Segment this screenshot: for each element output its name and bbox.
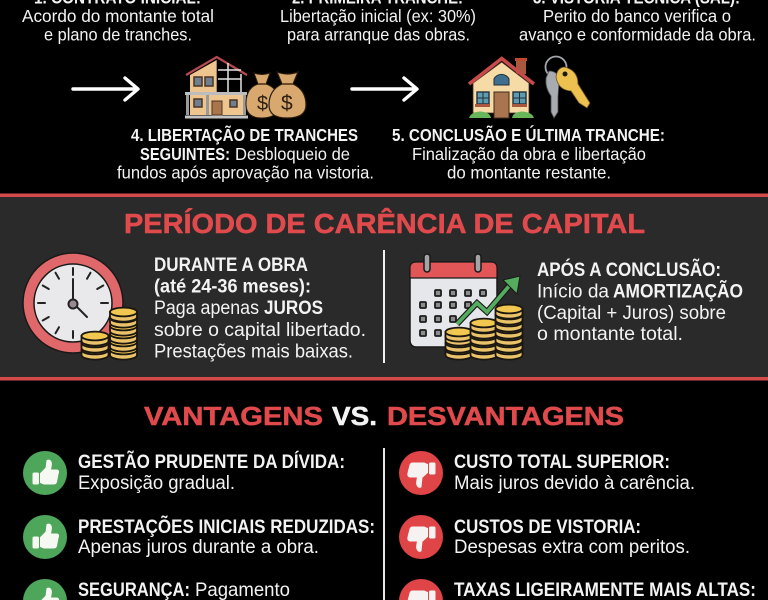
heading: vantagens vs desvantagens: VS. bbox=[332, 401, 377, 431]
step 1: contrato inicial bbox=[22, 0, 214, 44]
arrow 1 bbox=[73, 78, 138, 100]
text: durante a obra: sobre o capital libertado. bbox=[154, 320, 366, 341]
step 4: libertacao de tranches bbox=[117, 124, 374, 182]
advantage 1: Exposição gradual. bbox=[78, 473, 235, 494]
icon: money bags: $ bbox=[257, 93, 268, 115]
step 1: contrato inicial: e plano de tranches. bbox=[44, 24, 192, 44]
panel heading: PERÍODO DE CARÊNCIA DE CAPITAL bbox=[124, 208, 645, 239]
text: durante a obra: Paga apenas bbox=[154, 298, 259, 319]
step 3: vistoria tecnica: Perito do banco verifica o bbox=[543, 6, 731, 26]
step 2: primeira tranche: Libertação inicial (ex: 30%) bbox=[280, 6, 476, 26]
disadvantage 2: Despesas extra com peritos. bbox=[454, 537, 690, 558]
advantage 2: PRESTAÇÕES INICIAIS REDUZIDAS: bbox=[78, 516, 375, 538]
arrow 2 bbox=[352, 78, 417, 100]
text: apos a conclusao: APÓS A CONCLUSÃO: bbox=[537, 259, 721, 281]
advantage 2 bbox=[23, 515, 375, 559]
advantage 3 bbox=[23, 579, 290, 600]
icon: house under construction bbox=[185, 57, 248, 118]
text: durante a obra: JUROS bbox=[264, 298, 323, 319]
icon: money bags: $ bbox=[281, 92, 293, 115]
heading: vantagens vs desvantagens: DESVANTAGENS bbox=[387, 401, 624, 431]
text: apos a conclusao: AMORTIZAÇÃO bbox=[613, 280, 743, 302]
step 3: vistoria tecnica: avanço e conformidade da obra. bbox=[519, 24, 756, 44]
step 2: primeira tranche: para arranque das obras. bbox=[287, 24, 470, 44]
step 4: libertacao de tranches: SEGUINTES: bbox=[140, 144, 230, 164]
heading: vantagens vs desvantagens: VANTAGENS bbox=[144, 401, 323, 431]
disadvantage 1: Mais juros devido à carência. bbox=[454, 473, 695, 494]
icon: finished house bbox=[469, 58, 534, 118]
disadvantage 1 bbox=[399, 451, 695, 495]
disadvantage 1: CUSTO TOTAL SUPERIOR: bbox=[454, 452, 670, 473]
icon: calendar with growth arrow and coins bbox=[410, 254, 522, 360]
text: apos a conclusao bbox=[537, 259, 743, 345]
panel: periodo de carencia bbox=[0, 194, 768, 380]
text: durante a obra: Prestações mais baixas. bbox=[154, 342, 353, 362]
text: durante a obra bbox=[154, 255, 366, 362]
step 5: conclusao e ultima tranche bbox=[392, 124, 665, 182]
step 4: libertacao de tranches: Desbloqueio de bbox=[235, 144, 350, 164]
text: apos a conclusao: o montante total. bbox=[537, 324, 683, 345]
step 5: conclusao e ultima tranche: 5. CONCLUSÃO E ÚLTIMA TRANCHE: bbox=[392, 124, 665, 145]
icon: keys bbox=[546, 56, 590, 118]
advantage 2: Apenas juros durante a obra. bbox=[78, 537, 319, 558]
text: apos a conclusao: (Capital + Juros) sobre bbox=[537, 303, 726, 324]
step 3: vistoria tecnica bbox=[519, 0, 756, 44]
text: apos a conclusao: Início da bbox=[537, 282, 609, 302]
icon: clock with coins bbox=[23, 253, 137, 360]
step 2: primeira tranche bbox=[280, 0, 476, 44]
step 4: libertacao de tranches: 4. LIBERTAÇÃO DE TRANCHES bbox=[131, 124, 358, 145]
disadvantage 2 bbox=[399, 515, 690, 559]
disadvantage 2: CUSTOS DE VISTORIA: bbox=[454, 517, 641, 538]
advantage 1 bbox=[23, 451, 345, 495]
icon: money bags bbox=[246, 72, 306, 118]
step 5: conclusao e ultima tranche: Finalização da obra e libertação bbox=[412, 144, 646, 164]
step 1: contrato inicial: Acordo do montante total bbox=[22, 6, 214, 26]
advantage 1: GESTÃO PRUDENTE DA DÍVIDA: bbox=[78, 451, 345, 473]
text: durante a obra: DURANTE A OBRA bbox=[154, 255, 308, 276]
heading: vantagens vs desvantagens bbox=[144, 401, 624, 431]
text: durante a obra: (até 24-36 meses): bbox=[154, 276, 311, 298]
step 4: libertacao de tranches: fundos após aprovação na vistoria. bbox=[117, 162, 374, 182]
step 5: conclusao e ultima tranche: do montante restante. bbox=[447, 162, 611, 182]
